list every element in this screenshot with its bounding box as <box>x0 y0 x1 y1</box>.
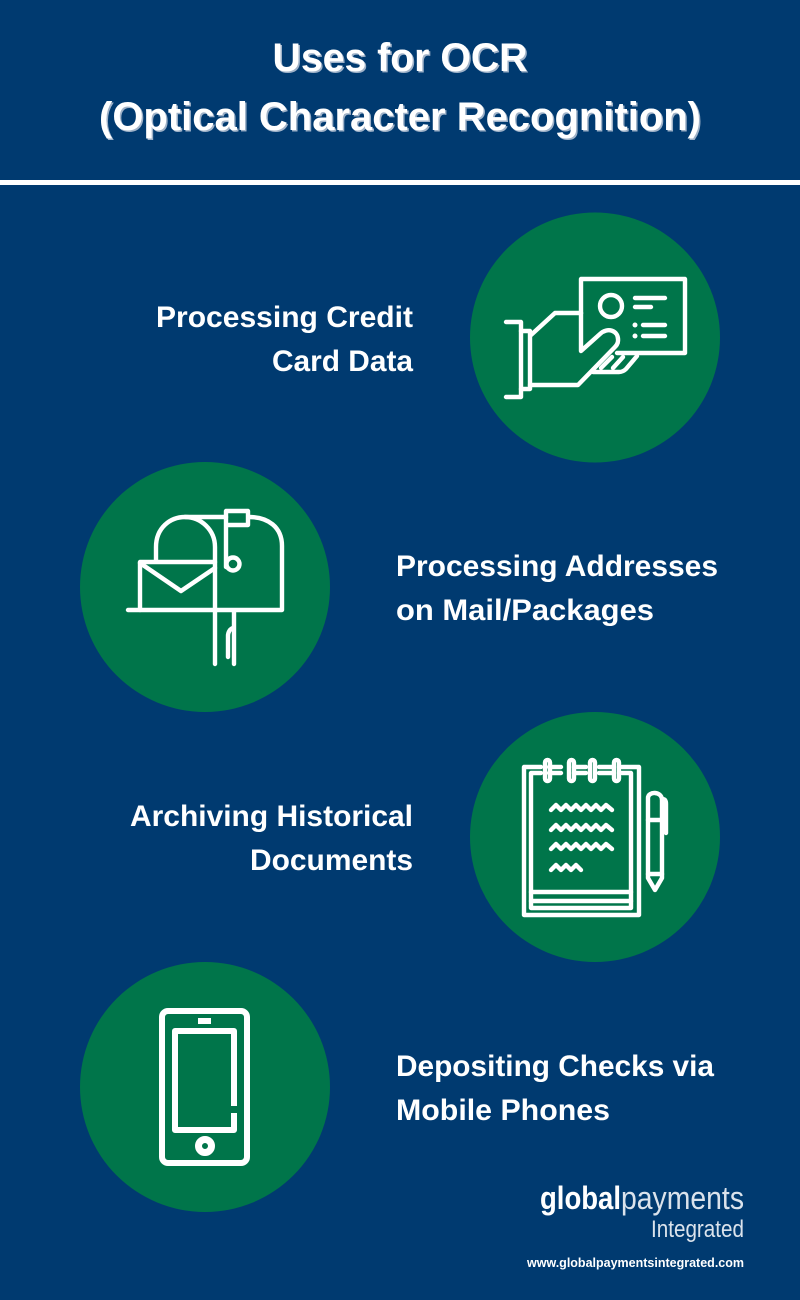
row 3: archiving documents <box>130 712 720 962</box>
label: processing addresses on mail/packages <box>396 550 718 627</box>
label: depositing checks via mobile phones: Mobile Phones <box>396 1094 610 1127</box>
title: Uses for OCR <box>274 38 529 82</box>
label: processing addresses on mail/packages: on Mail/Packages <box>396 594 654 627</box>
label: archiving historical documents <box>130 800 413 877</box>
logo: global payments integrated: global <box>540 1180 621 1216</box>
website url: www.globalpaymentsintegrated.com <box>526 1256 744 1270</box>
label: processing addresses on mail/packages: Processing Addresses <box>396 550 718 583</box>
icon circle: mobile phone <box>80 962 330 1212</box>
row 2: processing addresses <box>80 462 718 712</box>
title <box>99 36 702 140</box>
row 1: processing credit card data <box>156 212 720 462</box>
label: processing credit card data <box>156 301 413 378</box>
row 4: depositing checks <box>80 962 714 1212</box>
logo: global payments integrated: payments <box>621 1180 744 1216</box>
title: Uses for OCR <box>272 36 528 80</box>
label: depositing checks via mobile phones: Depositing Checks via <box>396 1050 714 1083</box>
icon circle: hand holding card <box>470 212 720 462</box>
label: processing credit card data: Processing Credit <box>156 301 413 334</box>
label: processing credit card data: Card Data <box>272 345 413 378</box>
logo: global payments integrated <box>540 1180 744 1243</box>
label: archiving historical documents: Archiving Historical <box>130 800 413 833</box>
icon circle: mailbox <box>80 462 330 712</box>
label: archiving historical documents: Documents <box>250 844 413 877</box>
logo: global payments integrated: Integrated <box>651 1216 744 1243</box>
icon circle: notepad and pen <box>470 712 720 962</box>
title: (Optical Character Recognition) <box>100 96 702 140</box>
title: (Optical Character Recognition) <box>99 95 701 139</box>
label: depositing checks via mobile phones <box>396 1050 714 1127</box>
